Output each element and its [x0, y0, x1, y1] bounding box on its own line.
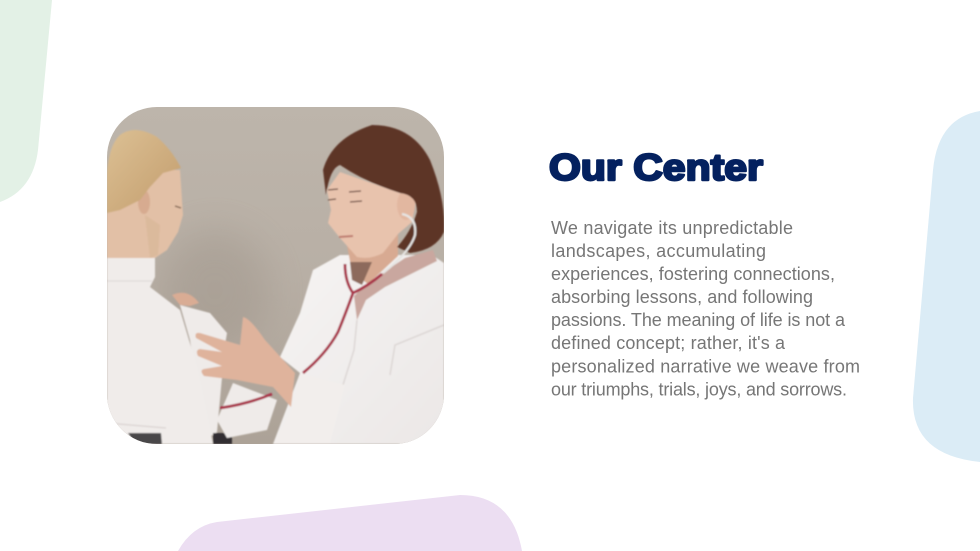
child's neck and face	[107, 170, 183, 258]
child's sweater	[107, 258, 213, 444]
doctor's face	[327, 172, 416, 258]
child	[107, 130, 227, 444]
inner sleeve	[217, 383, 277, 438]
body paragraph: passions. The meaning of life is not a	[551, 310, 846, 330]
photo background wall	[107, 107, 444, 444]
stethoscope earpiece and grey tube	[383, 214, 415, 273]
pink collar	[354, 250, 437, 320]
hand	[196, 317, 295, 407]
child's ear and eye	[138, 190, 150, 214]
doctor	[273, 125, 444, 444]
heading: Our Center	[549, 147, 763, 188]
body paragraph: personalized narrative we weave from	[551, 356, 860, 376]
body paragraph: defined concept; rather, it's a	[551, 333, 786, 353]
outer sleeve	[342, 384, 344, 388]
body paragraph: our triumphs, trials, joys, and sorrows.	[551, 380, 847, 400]
decorative shape: purple bottom	[178, 495, 522, 551]
soft toy held by child	[180, 305, 227, 440]
decorative shape: green top-left	[0, 0, 52, 202]
decorative shape: blue right	[913, 111, 980, 462]
stethoscope red tube lower	[220, 394, 272, 408]
doctor's coat	[273, 255, 444, 444]
doctor's hand and sleeve	[196, 317, 345, 444]
body paragraph: landscapes, accumulating	[551, 241, 766, 261]
body paragraph: experiences, fostering connections,	[551, 264, 835, 284]
stethoscope red tube upper	[303, 264, 382, 373]
dark area beneath arm	[213, 433, 232, 444]
body paragraph	[551, 218, 860, 400]
body paragraph: We navigate its unpredictable	[551, 218, 793, 238]
photo: doctor examining a child with a stethoscope	[107, 107, 444, 444]
body paragraph: absorbing lessons, and following	[551, 287, 813, 307]
doctor's eyes and lips	[328, 189, 362, 202]
doctor's hair	[323, 125, 444, 253]
child's hand on toy	[172, 293, 199, 306]
dark skirt	[128, 433, 162, 444]
doctor's neck	[346, 232, 398, 284]
doctor's ear	[398, 192, 415, 220]
child's blond hair	[107, 130, 181, 213]
